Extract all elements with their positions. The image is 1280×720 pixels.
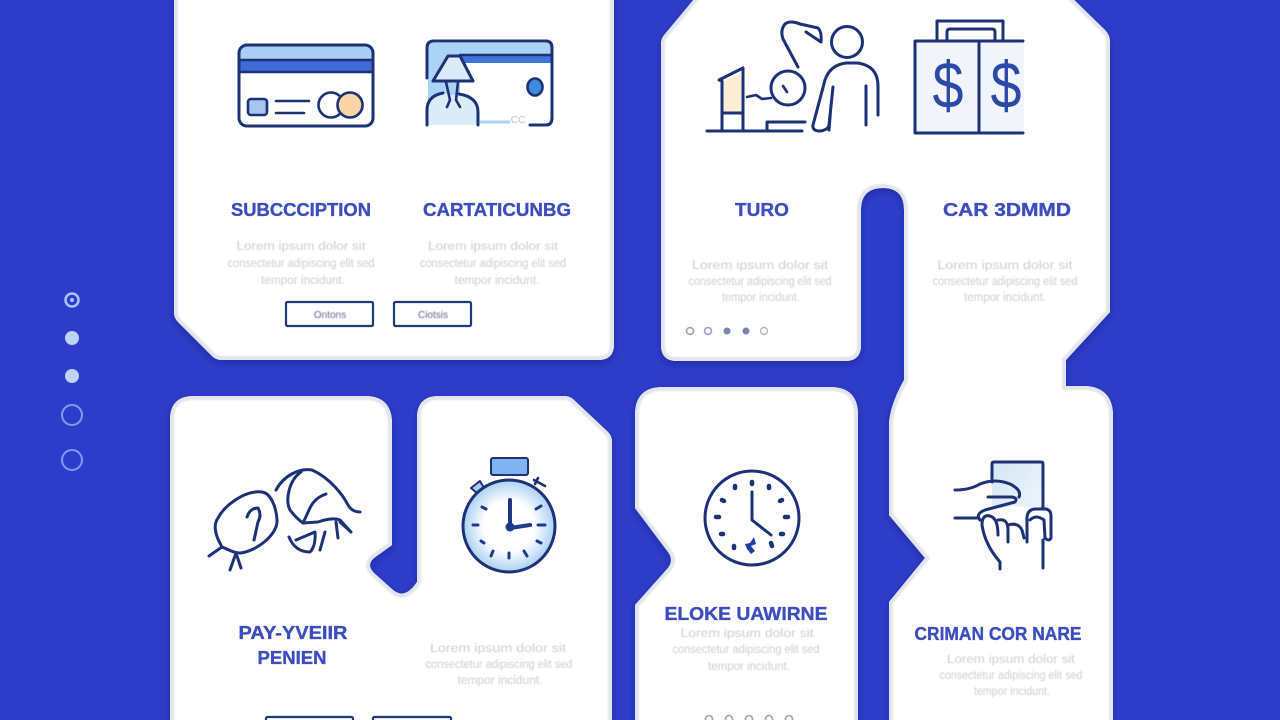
text: eloke uawirne description: Lorem ipsum dolor sit — [680, 628, 814, 640]
icon: two hands — [209, 470, 360, 570]
button: choose: Ciotsis — [418, 310, 448, 321]
heading: criman cor nare: CRIMAN COR NARE — [914, 624, 1082, 644]
text: stopwatch description: tempor incidunt. — [458, 675, 542, 687]
text: criman cor nare description — [940, 654, 1082, 698]
icon: money bag: $ — [932, 48, 964, 122]
icon: hand holding card — [955, 462, 1051, 569]
icon: card with person: CC — [511, 115, 525, 126]
icon: money bag: $ — [990, 48, 1022, 122]
button: right — [373, 717, 451, 720]
button: options — [286, 302, 373, 326]
text: subscription description: tempor incidunt. — [261, 275, 345, 287]
heading: pay-yveiir penien: PENIEN — [258, 648, 326, 668]
panel: subscription and card payments — [174, 0, 614, 360]
pagination dots: eloke uawirne — [706, 716, 792, 720]
heading: turo: TURO — [735, 200, 789, 220]
text: stopwatch description — [426, 643, 572, 687]
text: criman cor nare description: Lorem ipsum dolor sit — [947, 654, 1076, 666]
icon: clock — [705, 471, 799, 565]
text: subscription description: consectetur adipiscing elit sed — [228, 258, 374, 270]
text: cartaticunbg description: consectetur adipiscing elit sed — [420, 258, 566, 270]
text: eloke uawirne description: tempor incidunt. — [708, 661, 790, 673]
text: criman cor nare description: consectetur adipiscing elit sed — [940, 670, 1082, 682]
text: cartaticunbg description: Lorem ipsum dolor sit — [428, 241, 559, 253]
text: cartaticunbg description — [420, 241, 566, 287]
text: car demand description — [932, 260, 1078, 304]
button: options: Ontons — [314, 310, 346, 321]
text: car demand description: Lorem ipsum dolor sit — [938, 260, 1073, 272]
icon: person at desk — [707, 22, 878, 131]
text: eloke uawirne description: consectetur adipiscing elit sed — [672, 644, 820, 656]
pagination dots: turo — [686, 328, 768, 334]
progress dots — [62, 294, 82, 470]
icon: credit card — [239, 45, 373, 126]
heading: subscription: SUBCCCIPTION — [231, 200, 371, 220]
text: car demand description: tempor incidunt. — [964, 292, 1046, 304]
text: stopwatch description: Lorem ipsum dolor sit — [430, 643, 567, 655]
heading: car demand: CAR 3DMMD — [943, 200, 1071, 220]
button: choose — [394, 302, 471, 326]
text: turo description: consectetur adipiscing elit sed — [688, 276, 832, 288]
text: subscription description — [228, 241, 374, 287]
text: stopwatch description: consectetur adipiscing elit sed — [426, 659, 572, 671]
text: cartaticunbg description: tempor incidunt. — [454, 275, 540, 287]
heading: pay-yveiir penien — [238, 623, 348, 668]
heading: pay-yveiir penien: PAY-YVEIIR — [238, 623, 348, 643]
heading: cartaticunbg: CARTATICUNBG — [423, 200, 571, 220]
heading: eloke uawirne: ELOKE UAWIRNE — [664, 604, 828, 624]
text: turo description: tempor incidunt. — [722, 292, 800, 304]
text: turo description — [688, 260, 832, 304]
text: subscription description: Lorem ipsum dolor sit — [236, 241, 366, 253]
icon: money bag — [915, 21, 1024, 133]
panel: turo and car demand — [661, 0, 1113, 720]
text: car demand description: consectetur adipiscing elit sed — [932, 276, 1078, 288]
icon: card with person — [427, 41, 552, 126]
button: left — [266, 717, 353, 720]
panel: eloke uawirne and clock — [635, 387, 858, 720]
text: turo description: Lorem ipsum dolor sit — [692, 260, 829, 272]
icon: stopwatch — [463, 458, 555, 572]
text: criman cor nare description: tempor incidunt. — [974, 686, 1050, 698]
panel: pay-yveiir penien and stopwatch — [170, 396, 612, 720]
text: eloke uawirne description — [672, 628, 820, 673]
